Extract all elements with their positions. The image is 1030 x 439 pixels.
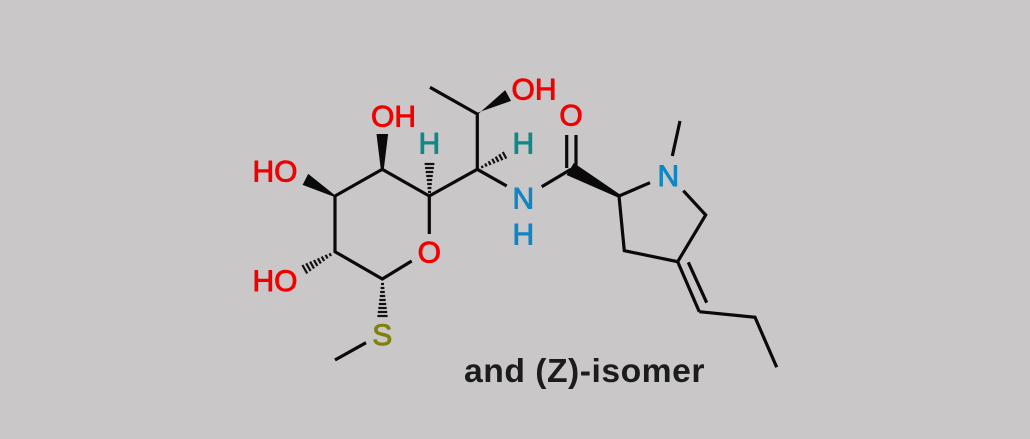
label: amide N: N (512, 182, 534, 215)
amide bonds (542, 135, 576, 187)
label: ring N: N (657, 160, 679, 193)
label: sulfur: S (372, 319, 392, 352)
hashed bond: ring H (425, 164, 434, 192)
pyrrolidine ring and propylidene bonds (619, 121, 777, 367)
label: ring O: O (418, 236, 441, 269)
hashed bond: side chain H (482, 152, 506, 168)
side chain bonds (429, 87, 507, 196)
sugar ring bonds (335, 169, 429, 279)
label: amide H: H (512, 218, 534, 251)
label: side chain H: H (512, 127, 534, 160)
label: top OH: OH (371, 101, 416, 134)
wedge bonds (303, 90, 620, 198)
label: ring H: H (418, 127, 440, 160)
label: left HO: HO (252, 156, 298, 189)
thiomethyl bond (335, 343, 366, 360)
caption: and (Z)-isomer (464, 352, 705, 390)
hashed bond: thiomethyl (377, 284, 388, 316)
label: lower HO: HO (252, 265, 298, 298)
label: side chain OH: OH (512, 73, 556, 106)
hashed bond: lower HO (302, 253, 331, 274)
label: carbonyl O: O (559, 100, 583, 133)
